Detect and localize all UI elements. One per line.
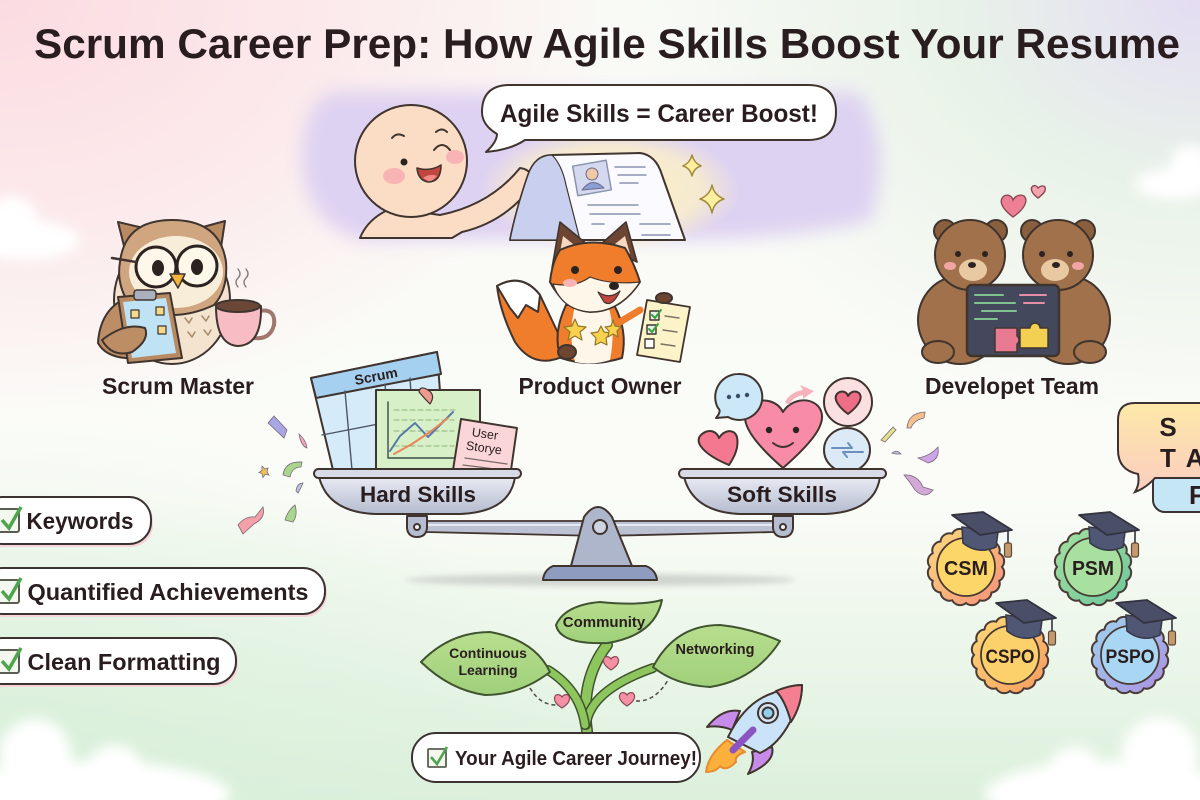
coffee cup [216, 269, 274, 346]
fox tail [497, 281, 568, 361]
label: Product Owner [518, 373, 682, 399]
stars [564, 319, 621, 345]
hero panel: person holding resume [302, 85, 880, 252]
swap arrows circle [824, 428, 870, 472]
user story card [453, 419, 517, 470]
fox body [550, 222, 640, 364]
badge: CSPO: CSPO [986, 647, 1034, 668]
sparkles [683, 155, 724, 213]
upper speech bubble [1118, 403, 1200, 492]
role: Development team bears [918, 186, 1110, 399]
speech bubble [482, 85, 836, 152]
owl [98, 220, 230, 364]
right bear [1021, 220, 1110, 364]
lower blue box [1153, 470, 1200, 512]
badge: CSPO [972, 600, 1056, 693]
balance scale: hard and soft skills [311, 352, 886, 586]
title: Scrum Career Prep: How Agile Skills Boost Your Resume [34, 20, 1180, 67]
left pan [314, 469, 521, 514]
left bear [918, 220, 1007, 364]
letters: S [1159, 412, 1177, 442]
growth chart [376, 388, 480, 470]
hard skills items [311, 352, 517, 470]
pill: keywords [0, 497, 153, 547]
leaf: community: Community [563, 614, 646, 631]
ground shadow [405, 574, 795, 586]
pill: quantified achievements [0, 568, 327, 617]
soft skills items [699, 374, 872, 472]
leaf: continuous learning: Learning [458, 662, 518, 678]
laptop with code and puzzle [967, 285, 1059, 356]
clipboard [637, 293, 690, 362]
journey pill [412, 733, 700, 782]
person [355, 105, 532, 238]
badge: PSPO: PSPO [1106, 647, 1154, 668]
leaf: community [556, 600, 662, 643]
badge: PSM: PSM [1072, 558, 1114, 580]
fulcrum [543, 507, 657, 580]
pink heart bubble [824, 378, 872, 426]
beam [407, 516, 793, 537]
label: Developet Team [925, 373, 1099, 399]
user story card: User [471, 425, 499, 443]
letters: T [1160, 443, 1176, 473]
right pan [679, 469, 886, 514]
pill: clean formatting: Clean Formatting [28, 649, 220, 675]
pill: quantified achievements: Quantified Achievements [28, 579, 308, 605]
stem [548, 645, 653, 731]
checklist pills [0, 497, 327, 687]
pill: clean formatting [0, 638, 238, 687]
badge: PSM [1055, 512, 1139, 605]
label: Scrum Master [102, 373, 254, 399]
speech bubble: Agile Skills = Career Boost! [500, 100, 818, 128]
pill: keywords: Keywords [26, 508, 134, 534]
badge: PSPO [1092, 600, 1176, 693]
icon: rocket [706, 685, 802, 774]
hearts [1001, 186, 1045, 217]
scrum board [311, 352, 446, 470]
journey pill: Your Agile Career Journey! [455, 747, 697, 770]
role: Scrum Master owl [98, 220, 274, 399]
connector hearts [530, 657, 668, 708]
leaf: networking: Networking [676, 642, 754, 658]
STAR method bubbles [1118, 403, 1200, 512]
badge: CSM: CSM [944, 558, 988, 580]
badge: CSM [928, 512, 1012, 605]
yellow glow [480, 128, 740, 252]
chat bubble [715, 374, 762, 420]
resume [510, 153, 685, 240]
scrum board: Scrum [353, 364, 399, 388]
arrow [785, 385, 814, 405]
letters [1159, 412, 1200, 510]
confetti [238, 412, 938, 534]
left pan: Hard Skills [360, 482, 476, 507]
small heart [699, 431, 738, 465]
leaf: continuous learning [421, 632, 550, 695]
lilac backdrop [302, 92, 880, 240]
leaf: networking [653, 625, 780, 687]
big smiling heart [745, 400, 822, 468]
certification badges [928, 512, 1176, 693]
leaf: continuous learning: Continuous [449, 645, 527, 661]
user story card: Storye [465, 439, 503, 457]
right pan: Soft Skills [727, 482, 837, 507]
role: Product Owner fox [497, 222, 690, 399]
career plant [421, 600, 780, 731]
